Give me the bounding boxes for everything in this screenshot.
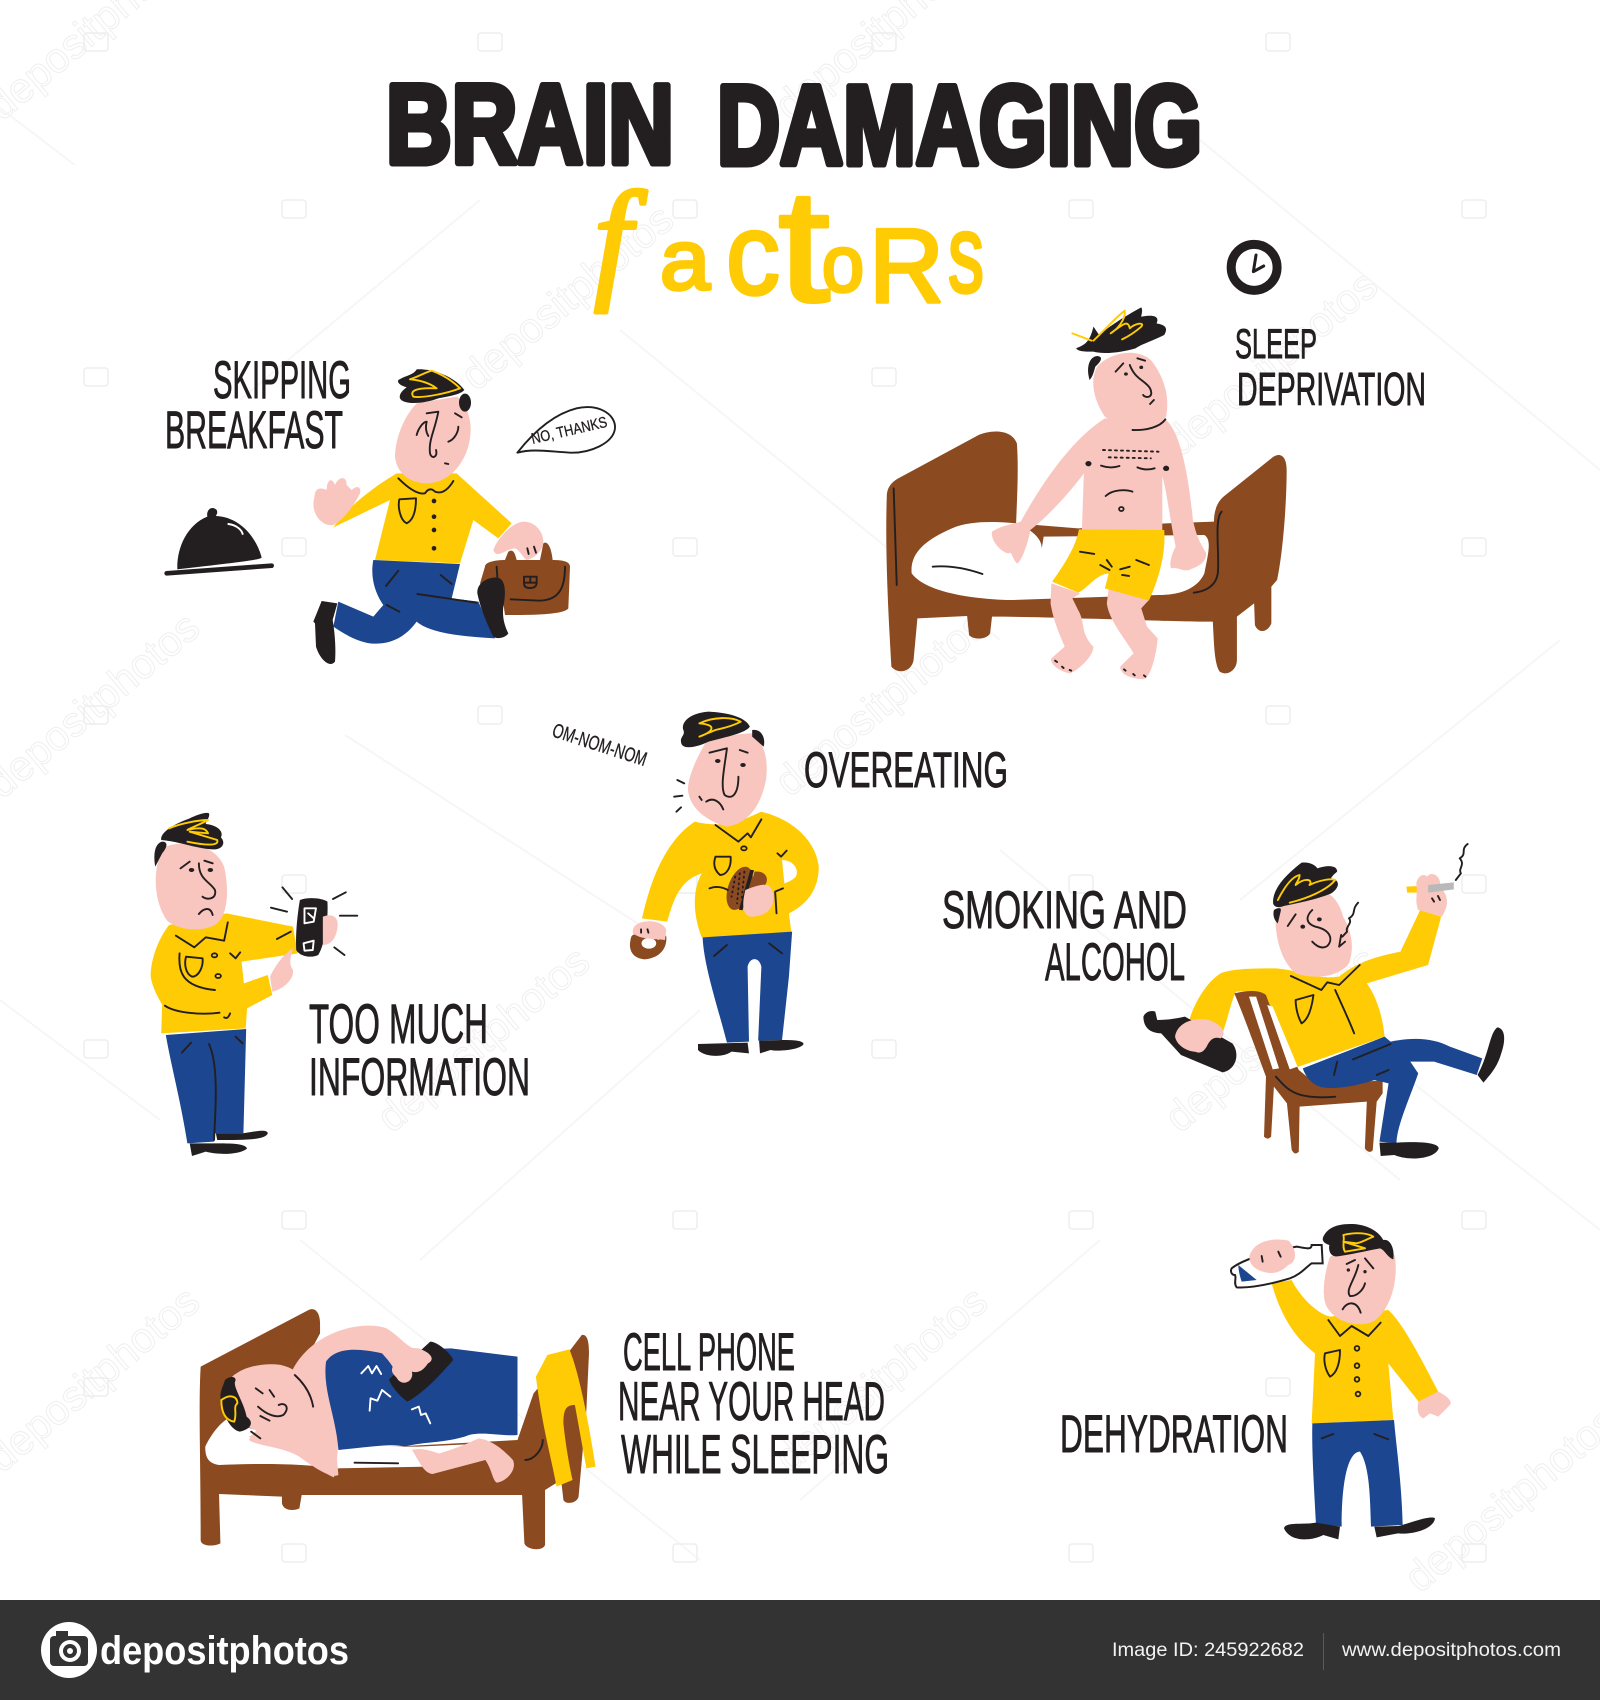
label: cell phone near your head while sleeping: WHILE SLEEPING [621, 1423, 889, 1485]
other hand [1418, 1392, 1451, 1418]
label: sleep deprivation: SLEEP [1235, 320, 1317, 367]
figure: dehydration [1231, 1224, 1451, 1539]
icon: phone [271, 887, 357, 957]
hair [398, 369, 471, 412]
label: cell phone near your head while sleeping: CELL PHONE [623, 1323, 795, 1382]
label: skipping breakfast: SKIPPING [213, 351, 351, 410]
speech bubble: no thanks [517, 407, 615, 453]
icon: cloche [167, 508, 272, 573]
icon: burger [722, 865, 773, 917]
subtitle: factors: t [778, 156, 830, 335]
subtitle: factors: a [660, 213, 711, 308]
subtitle: factors: s [948, 193, 984, 316]
text: depositphotos [368, 937, 598, 1141]
bed [200, 1309, 589, 1549]
head [395, 397, 471, 483]
icon: clock [1231, 244, 1277, 290]
head [226, 1364, 313, 1432]
body [992, 418, 1206, 570]
face and chest details [1085, 358, 1169, 511]
lower arm [249, 1436, 338, 1476]
head [1324, 1247, 1396, 1324]
icon: logo camera [41, 1622, 97, 1678]
label: too much information [309, 992, 530, 1107]
label: cell phone near your head while sleeping [618, 1323, 889, 1485]
text: depositphotos [1156, 937, 1386, 1141]
icon: water bottle [1231, 1245, 1323, 1287]
image id: Image ID: 245922682 [1112, 1639, 1304, 1661]
shirt details [398, 478, 453, 551]
figure: sleep deprivation [886, 244, 1287, 679]
text: depositphotos [452, 195, 682, 399]
hair [1072, 307, 1166, 380]
figure: too much information [151, 813, 357, 1156]
hair [220, 1377, 251, 1432]
figure: cell phone near head [200, 1309, 596, 1549]
blanket [325, 1348, 517, 1450]
subtitle: factors: f [594, 165, 647, 313]
shorts [1052, 529, 1165, 601]
label: dehydration: DEHYDRATION [1060, 1405, 1288, 1464]
label: too much information: TOO MUCH [309, 992, 488, 1055]
head [1276, 891, 1352, 977]
label: smoking and alcohol: SMOKING AND [942, 881, 1187, 940]
draped clothes [536, 1349, 596, 1487]
subtitle: factors [594, 156, 984, 335]
figure: skipping breakfast [167, 369, 615, 664]
shoes [313, 577, 508, 664]
face and smoke [1288, 903, 1360, 1033]
hair [1273, 862, 1338, 923]
hands [313, 478, 543, 560]
speech bubble: no thanks: NO, THANKS [530, 414, 609, 448]
icon: cigarette and hand [1406, 844, 1468, 917]
label: skipping breakfast: BREAKFAST [165, 401, 343, 460]
lower leg [412, 1438, 514, 1483]
figure: overeating [630, 712, 819, 1056]
pants [1312, 1420, 1403, 1527]
label: smoking and alcohol [942, 881, 1187, 992]
icon: briefcase [480, 543, 570, 615]
text: depositphotos [766, 601, 996, 805]
title: brain damaging [386, 62, 1202, 188]
label: om-nom-nom: OM-NOM-NOM [549, 720, 649, 771]
pants [333, 560, 495, 644]
website: www.depositphotos.com [1341, 1639, 1561, 1661]
icon: phone [389, 1342, 453, 1402]
head [1093, 353, 1167, 429]
arm and shoulder [249, 1326, 419, 1477]
label: smoking and alcohol: ALCOHOL [1045, 933, 1185, 992]
face [1343, 1258, 1373, 1313]
label: sleep deprivation: DEPRIVATION [1237, 363, 1426, 415]
legs [1051, 583, 1158, 679]
subtitle: factors: R [869, 208, 944, 325]
shoes [1379, 1027, 1504, 1158]
pillow and sheet [205, 1418, 543, 1468]
figures: too much information and overeating [151, 712, 819, 1156]
shirt [1189, 910, 1441, 1068]
chair [1234, 991, 1383, 1153]
label: overeating: OVEREATING [804, 742, 1008, 798]
footer bar [0, 1600, 1600, 1700]
text: depositphotos [1156, 261, 1386, 465]
shirt [1272, 1280, 1438, 1423]
hair [1323, 1224, 1394, 1259]
pillow and mattress [911, 522, 1209, 600]
hand [392, 1348, 432, 1383]
pants [1303, 1037, 1482, 1143]
figure: smoking and alcohol [1143, 844, 1504, 1158]
label: cell phone near your head while sleeping: NEAR YOUR HEAD [618, 1370, 885, 1432]
label: sleep deprivation [1235, 320, 1426, 415]
icon: donut [630, 921, 666, 959]
logo text: depositphotos [100, 1629, 349, 1673]
title: brain damaging: BRAIN [386, 62, 674, 187]
shoes [1284, 1518, 1435, 1539]
title: brain damaging: DAMAGING [717, 63, 1202, 188]
label: skipping breakfast [165, 351, 351, 460]
subtitle: factors: c [726, 189, 780, 319]
shirt [333, 473, 512, 563]
hand [1249, 1239, 1295, 1273]
shirt details [1324, 1320, 1381, 1396]
subtitle: factors: o [822, 219, 864, 308]
label: too much information: INFORMATION [309, 1048, 530, 1107]
text: depositphotos [766, 1277, 996, 1481]
bed [886, 431, 1287, 673]
icon: bottle [1143, 1011, 1236, 1072]
